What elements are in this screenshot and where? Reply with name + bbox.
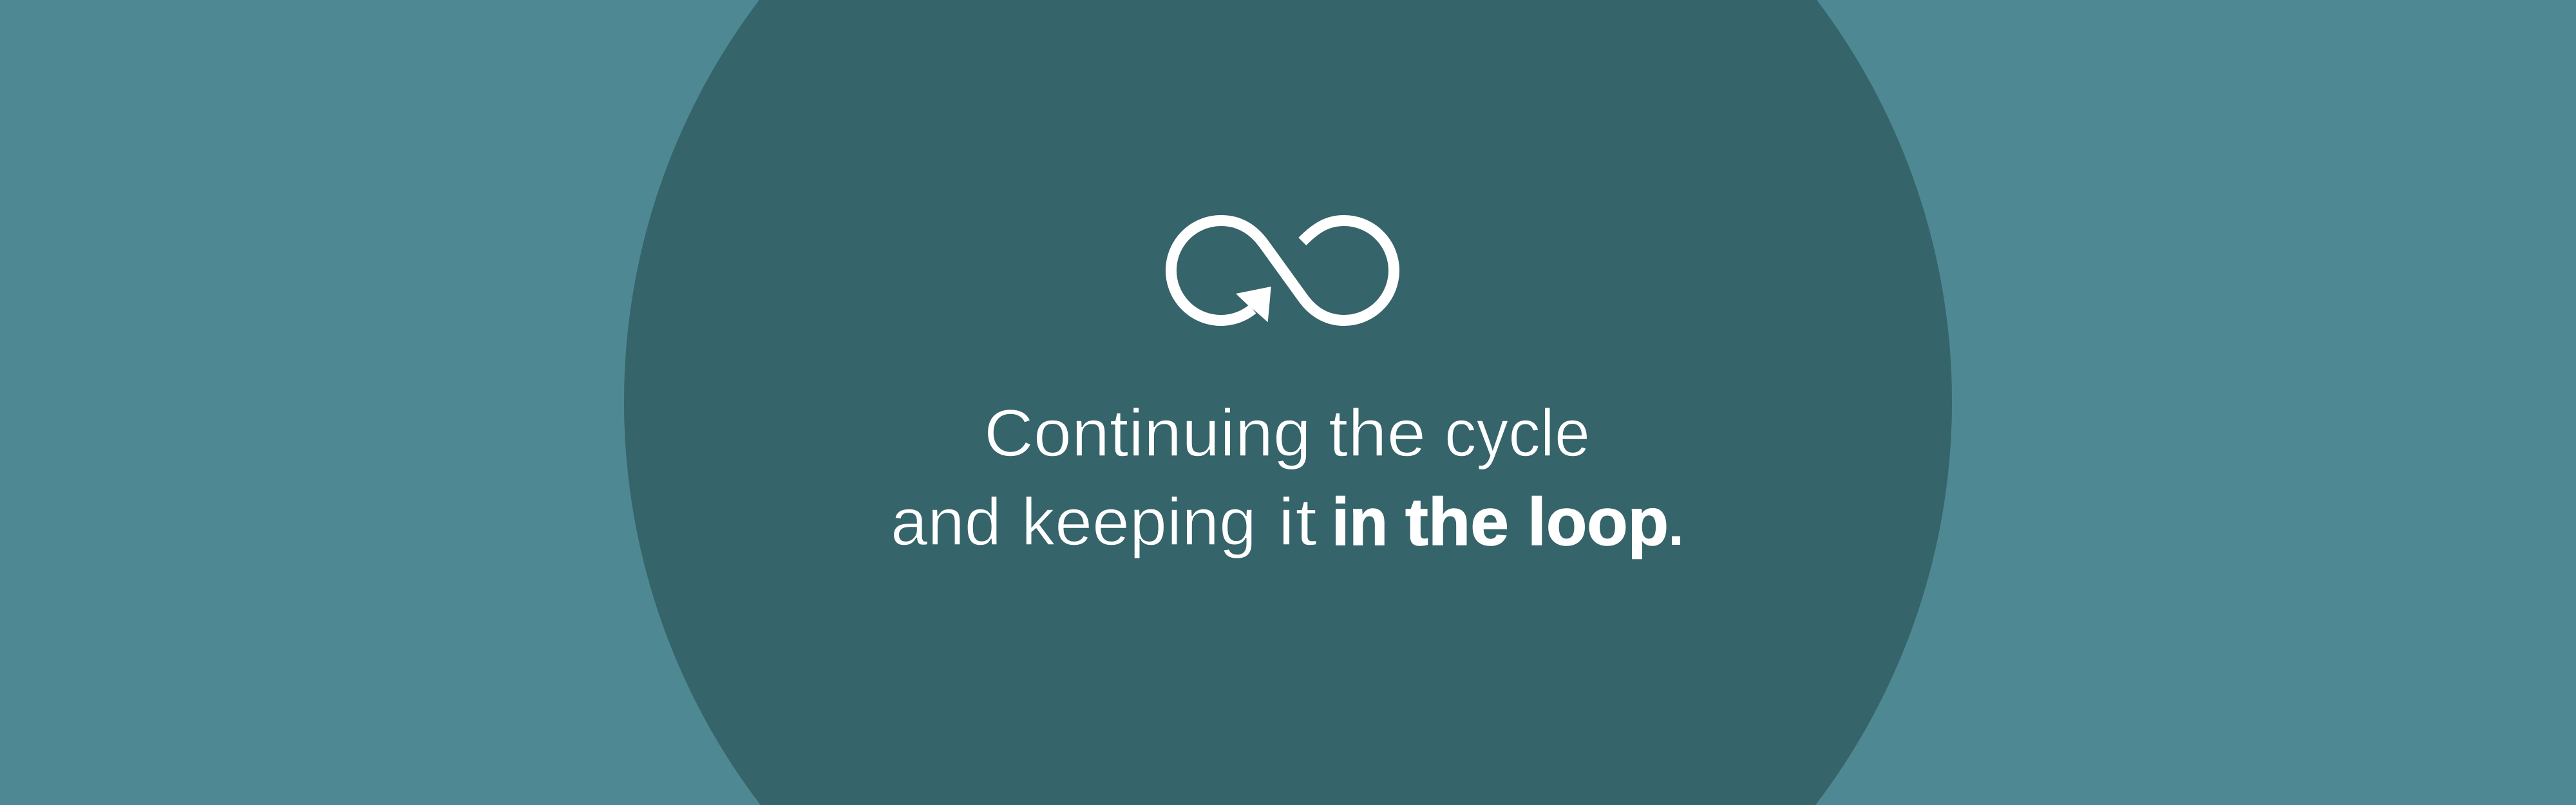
heading: line two: in xyxy=(1332,485,1388,560)
heading: line two xyxy=(891,485,1684,560)
large dark circle xyxy=(624,0,1952,805)
heading: line two: and xyxy=(891,485,1001,560)
heading: line two: . xyxy=(1668,493,1684,558)
icon: infinity loop with arrow xyxy=(1171,220,1394,322)
heading: line one: the xyxy=(1329,396,1426,471)
heading: line two: the xyxy=(1405,485,1509,560)
heading: line two: keeping xyxy=(1021,485,1256,560)
heading: line two: it xyxy=(1278,485,1317,560)
heading: line two: loop xyxy=(1528,485,1669,560)
heading: line one: cycle xyxy=(1444,396,1590,471)
heading: line one xyxy=(984,396,1590,471)
heading: line one: Continuing xyxy=(984,396,1311,471)
